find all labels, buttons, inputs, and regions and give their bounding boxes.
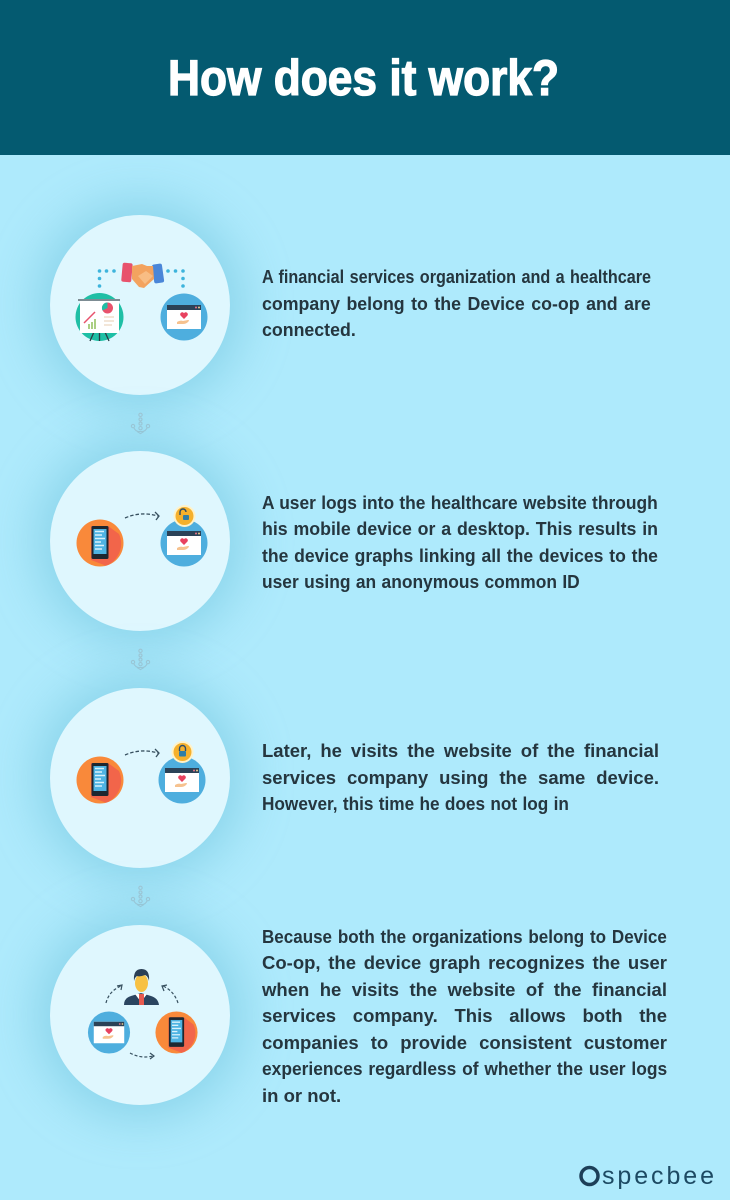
arrow: browser to phone <box>130 1053 154 1059</box>
text block: step 4: experiences regardless of whether the user logs <box>262 1058 667 1079</box>
arrow: dashed curve <box>125 749 159 757</box>
text block: step 3 <box>262 740 659 814</box>
icon: mobile phone <box>76 520 124 566</box>
icon: anchor connector 1 <box>131 413 150 434</box>
dotted connectors <box>98 269 185 288</box>
icon: anchor connector 3 <box>131 886 150 907</box>
icon: handshake <box>121 263 164 288</box>
panel: step 2 circle with icons <box>36 437 244 645</box>
arrow: phone to person <box>162 985 178 1003</box>
text block: step 4: services company. This allows both the <box>262 1005 667 1026</box>
header band <box>0 0 730 155</box>
text block: step 4: when he visits the website of the financial <box>262 979 667 1000</box>
icon: mobile phone <box>76 756 124 804</box>
icon: website with open lock <box>160 505 208 566</box>
arrow: dashed curve <box>125 512 159 520</box>
text block: step 1: company belong to the Device co-op and are <box>262 293 651 314</box>
icon: website with heart <box>160 294 208 340</box>
title: How does it work? <box>168 50 559 106</box>
text block: step 1 <box>262 266 651 340</box>
text block: step 4: in or not. <box>262 1085 341 1106</box>
text block: step 4 <box>262 926 667 1106</box>
text block: step 3: However, this time he does not log in <box>262 793 569 814</box>
icon: website with closed lock <box>158 741 206 804</box>
text block: step 1: connected. <box>262 319 356 340</box>
icon: anchor connector 2 <box>131 649 150 670</box>
icon: website with heart <box>88 1011 130 1054</box>
text block: step 2: user using an anonymous common ID <box>262 571 580 592</box>
text block: step 2: the device graphs linking all the devices to the <box>262 545 658 566</box>
arrow: browser to person <box>106 985 122 1003</box>
icon: mobile phone <box>155 1011 198 1054</box>
logo: specbee: specbee <box>602 1162 714 1190</box>
text block: step 3: services company using the same device. <box>262 767 659 788</box>
text block: step 3: Later, he visits the website of the financial <box>262 740 659 761</box>
text block: step 4: Co-op, the device graph recognizes the user <box>262 952 667 973</box>
text block: step 2: A user logs into the healthcare website through <box>262 492 658 513</box>
text block: step 4: Because both the organizations belong to Device <box>262 926 667 947</box>
panel: step 4 circle with icons <box>36 911 244 1119</box>
text block: step 1: A financial services organization and a healthcare <box>262 266 651 287</box>
text block: step 4: companies to provide consistent customer <box>262 1032 667 1053</box>
panel: step 3 circle with icons <box>36 674 244 882</box>
panel: step 1 circle with icons <box>36 201 244 409</box>
text block: step 2 <box>262 492 658 592</box>
text block: step 2: his mobile device or a desktop. This results in <box>262 518 658 539</box>
icon: presentation board <box>76 293 124 341</box>
icon: businessman <box>124 969 159 1005</box>
